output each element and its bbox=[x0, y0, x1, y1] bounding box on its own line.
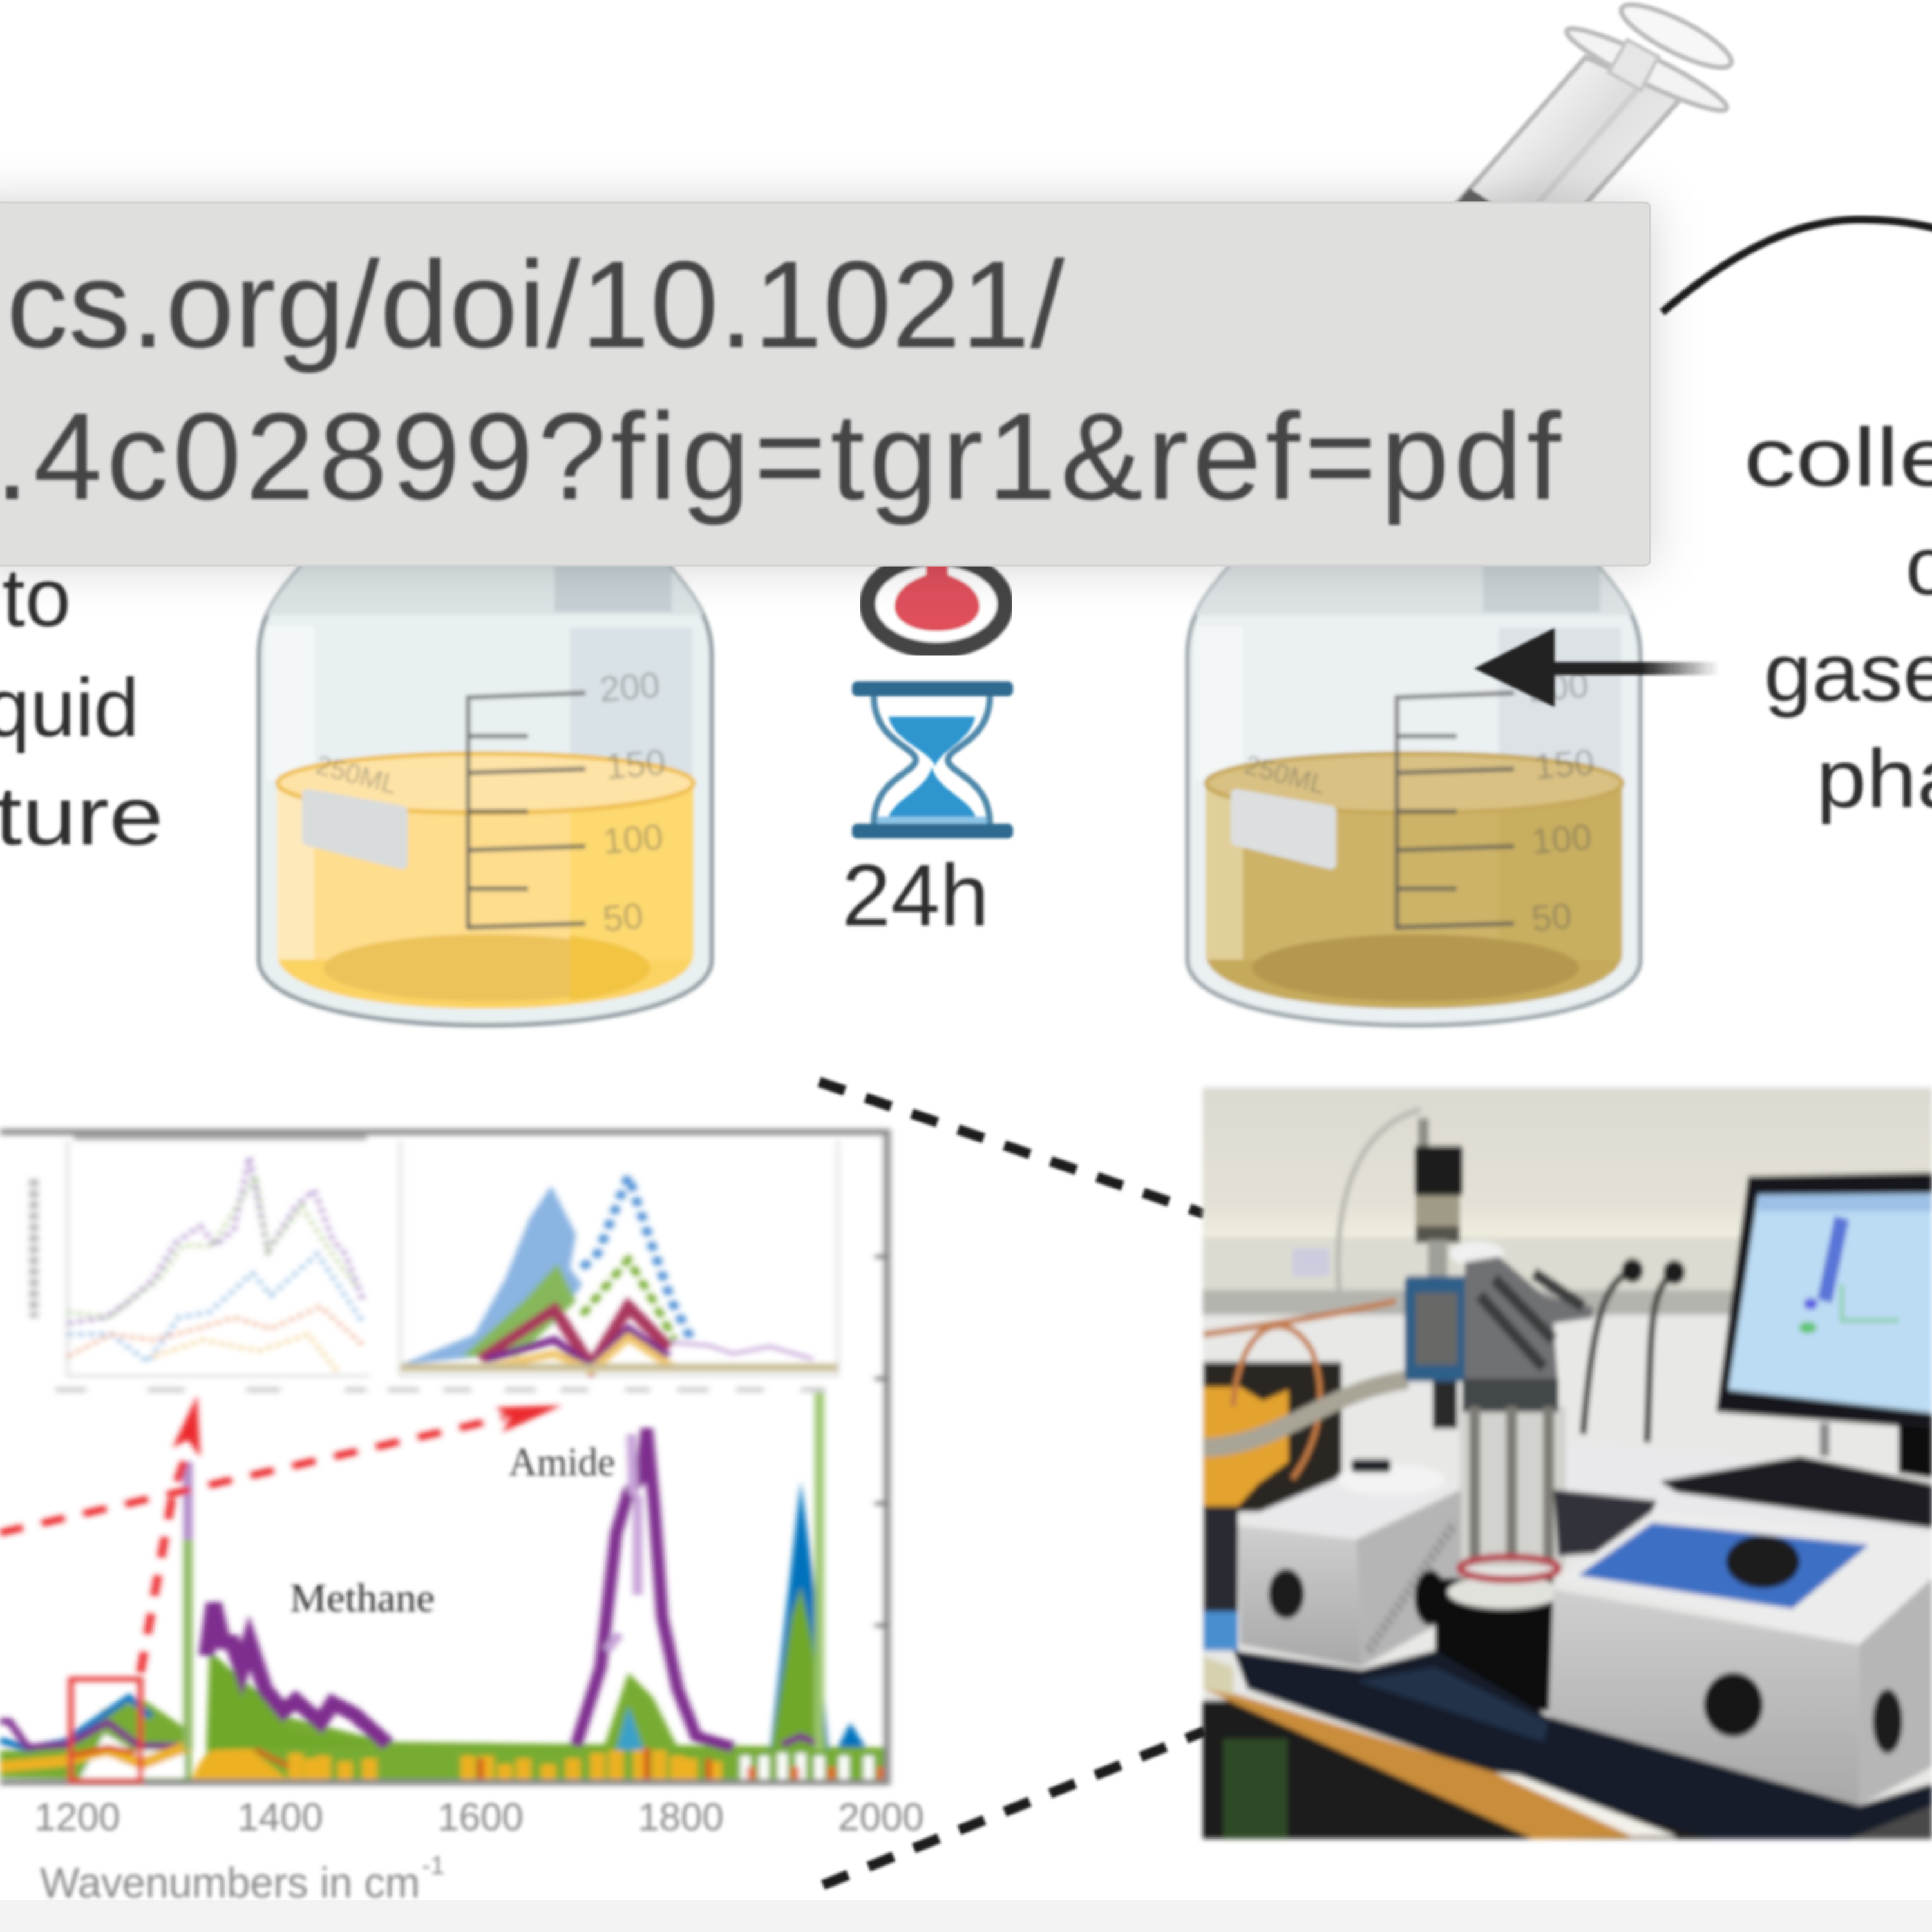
x-axis tick labels: 2000 bbox=[838, 1795, 924, 1839]
inset plot: amide detail bbox=[388, 1141, 838, 1390]
reactor clamps and rods bbox=[1460, 1406, 1566, 1567]
left spectrometer module bbox=[1240, 1470, 1460, 1539]
x-axis title: -1 bbox=[422, 1852, 445, 1880]
beaker: incubated liquid (darker) bbox=[1188, 554, 1640, 1025]
left equipment bbox=[1204, 1362, 1341, 1511]
chart frame bbox=[0, 1132, 887, 1783]
chart annotations: Methane bbox=[290, 1577, 435, 1620]
highlight box bbox=[71, 1679, 140, 1781]
text: right collection label: colle bbox=[1744, 412, 1932, 504]
pressure tube and reactor head bbox=[1338, 1110, 1421, 1290]
instrument base and table bbox=[1233, 1651, 1932, 1839]
text: left process label: to bbox=[2, 552, 71, 644]
wall cables bbox=[1583, 1271, 1679, 1443]
chart: FTIR spectrum with insets bbox=[0, 1132, 924, 1906]
red dashed arrows bbox=[0, 1417, 505, 1672]
URL text: cs.org/doi/10.1021/ bbox=[6, 235, 1065, 374]
inset plot: low-wavenumber detail bbox=[34, 1141, 370, 1390]
text: right collection label bbox=[1744, 412, 1932, 825]
scale numbers: 100 bbox=[601, 816, 665, 862]
URL text: .4c02899?fig=tgr1&ref=pdf bbox=[0, 387, 1562, 526]
chart annotations bbox=[290, 1441, 615, 1620]
x-axis tick labels: 1200 bbox=[34, 1795, 120, 1839]
main spectrum traces bbox=[0, 1390, 887, 1781]
photo: FTIR instrument and reactor bbox=[1202, 1088, 1932, 1839]
scale numbers: 150 bbox=[604, 741, 667, 787]
scale numbers: 50 bbox=[601, 895, 645, 939]
x-axis tick labels: 1800 bbox=[638, 1795, 724, 1839]
text: incubation time: 24h bbox=[842, 846, 989, 944]
volume scale bbox=[1397, 693, 1514, 929]
curved line to sampling label bbox=[1662, 220, 1932, 312]
scale numbers: 250ML bbox=[1242, 749, 1329, 800]
keyboard bbox=[1660, 1456, 1932, 1528]
scale numbers: 150 bbox=[1533, 741, 1596, 787]
scale numbers bbox=[1242, 664, 1596, 939]
scale numbers: 200 bbox=[1527, 664, 1590, 710]
dashed zoom lines from spectrum to instrument bbox=[819, 1082, 1205, 1885]
scale numbers: 50 bbox=[1530, 895, 1573, 939]
bottom page strip bbox=[0, 1900, 1932, 1932]
scale numbers: 100 bbox=[1530, 816, 1593, 862]
x-axis tick labels: 1400 bbox=[237, 1795, 323, 1839]
monitor bbox=[1820, 1423, 1830, 1456]
scale numbers bbox=[313, 664, 667, 939]
right spectrometer module bbox=[1561, 1511, 1932, 1645]
scale numbers: 200 bbox=[598, 664, 661, 710]
beaker: fresh liquid (yellow) bbox=[259, 554, 712, 1025]
x-axis tick labels: 1600 bbox=[437, 1795, 524, 1839]
popup tooltip with URL bbox=[0, 202, 1650, 565]
icon: syringe bbox=[1449, 0, 1738, 213]
URL text bbox=[0, 235, 1562, 526]
reaction cell bbox=[1435, 1578, 1553, 1711]
arrow: gas phase pointing into beaker bbox=[1474, 628, 1719, 707]
scale numbers: 250ML bbox=[313, 749, 401, 800]
x-axis title: Wavenumbers in cm bbox=[40, 1859, 420, 1906]
chart annotations: Amide bbox=[509, 1441, 615, 1484]
x-axis tick labels bbox=[34, 1795, 924, 1839]
volume scale bbox=[468, 693, 585, 929]
bench surface bbox=[1566, 1445, 1932, 1539]
icon: temperature dial bbox=[867, 554, 1005, 650]
text: left process label bbox=[0, 552, 164, 862]
icon: hourglass bbox=[852, 681, 1013, 838]
